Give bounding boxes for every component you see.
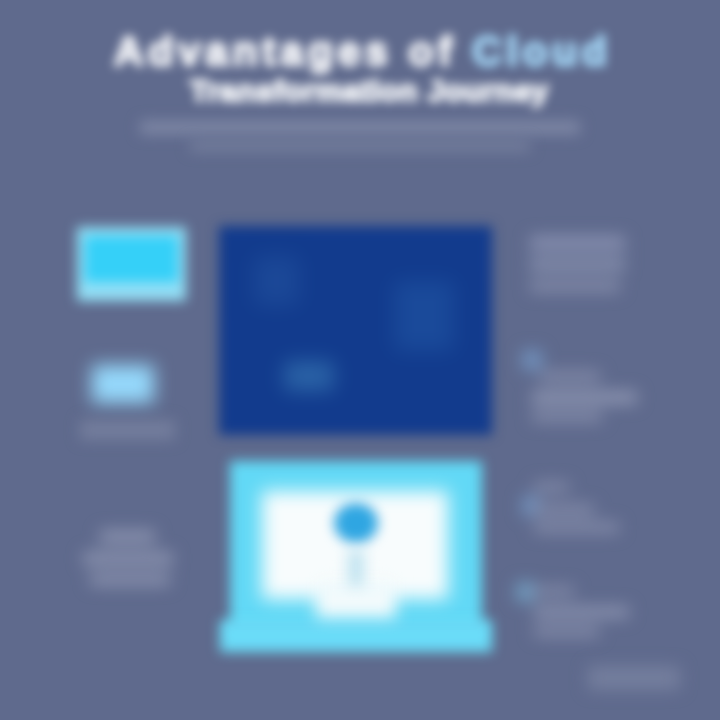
left panel: cyan card — [77, 227, 186, 301]
left icon: light blue box — [92, 365, 154, 403]
subtitle line 2 — [190, 141, 530, 151]
left caption — [80, 420, 175, 440]
laptop illustration — [212, 453, 500, 660]
right text block 2 — [516, 344, 641, 427]
right text block 1 — [526, 230, 628, 297]
center panel: dark blue — [219, 226, 492, 435]
panel detail top left — [254, 256, 299, 306]
right text block 4 — [510, 576, 632, 642]
cyan card inner — [85, 236, 178, 282]
left text block — [80, 524, 176, 592]
screen lower tab — [316, 580, 396, 618]
laptop body — [230, 461, 482, 633]
title — [108, 28, 612, 114]
subtitle line 1 — [140, 121, 580, 134]
title line 1: Advantages of Cloud — [114, 28, 611, 74]
laptop screen — [262, 491, 448, 599]
panel detail bottom — [284, 361, 334, 391]
screen stem — [348, 550, 364, 586]
title line 2: Transformation Journey — [190, 75, 549, 108]
panel detail right — [394, 281, 454, 351]
laptop base — [220, 620, 492, 652]
footer text — [588, 666, 680, 690]
subtitle — [138, 116, 582, 152]
screen circle — [334, 503, 378, 543]
right text block 3 — [516, 478, 619, 538]
